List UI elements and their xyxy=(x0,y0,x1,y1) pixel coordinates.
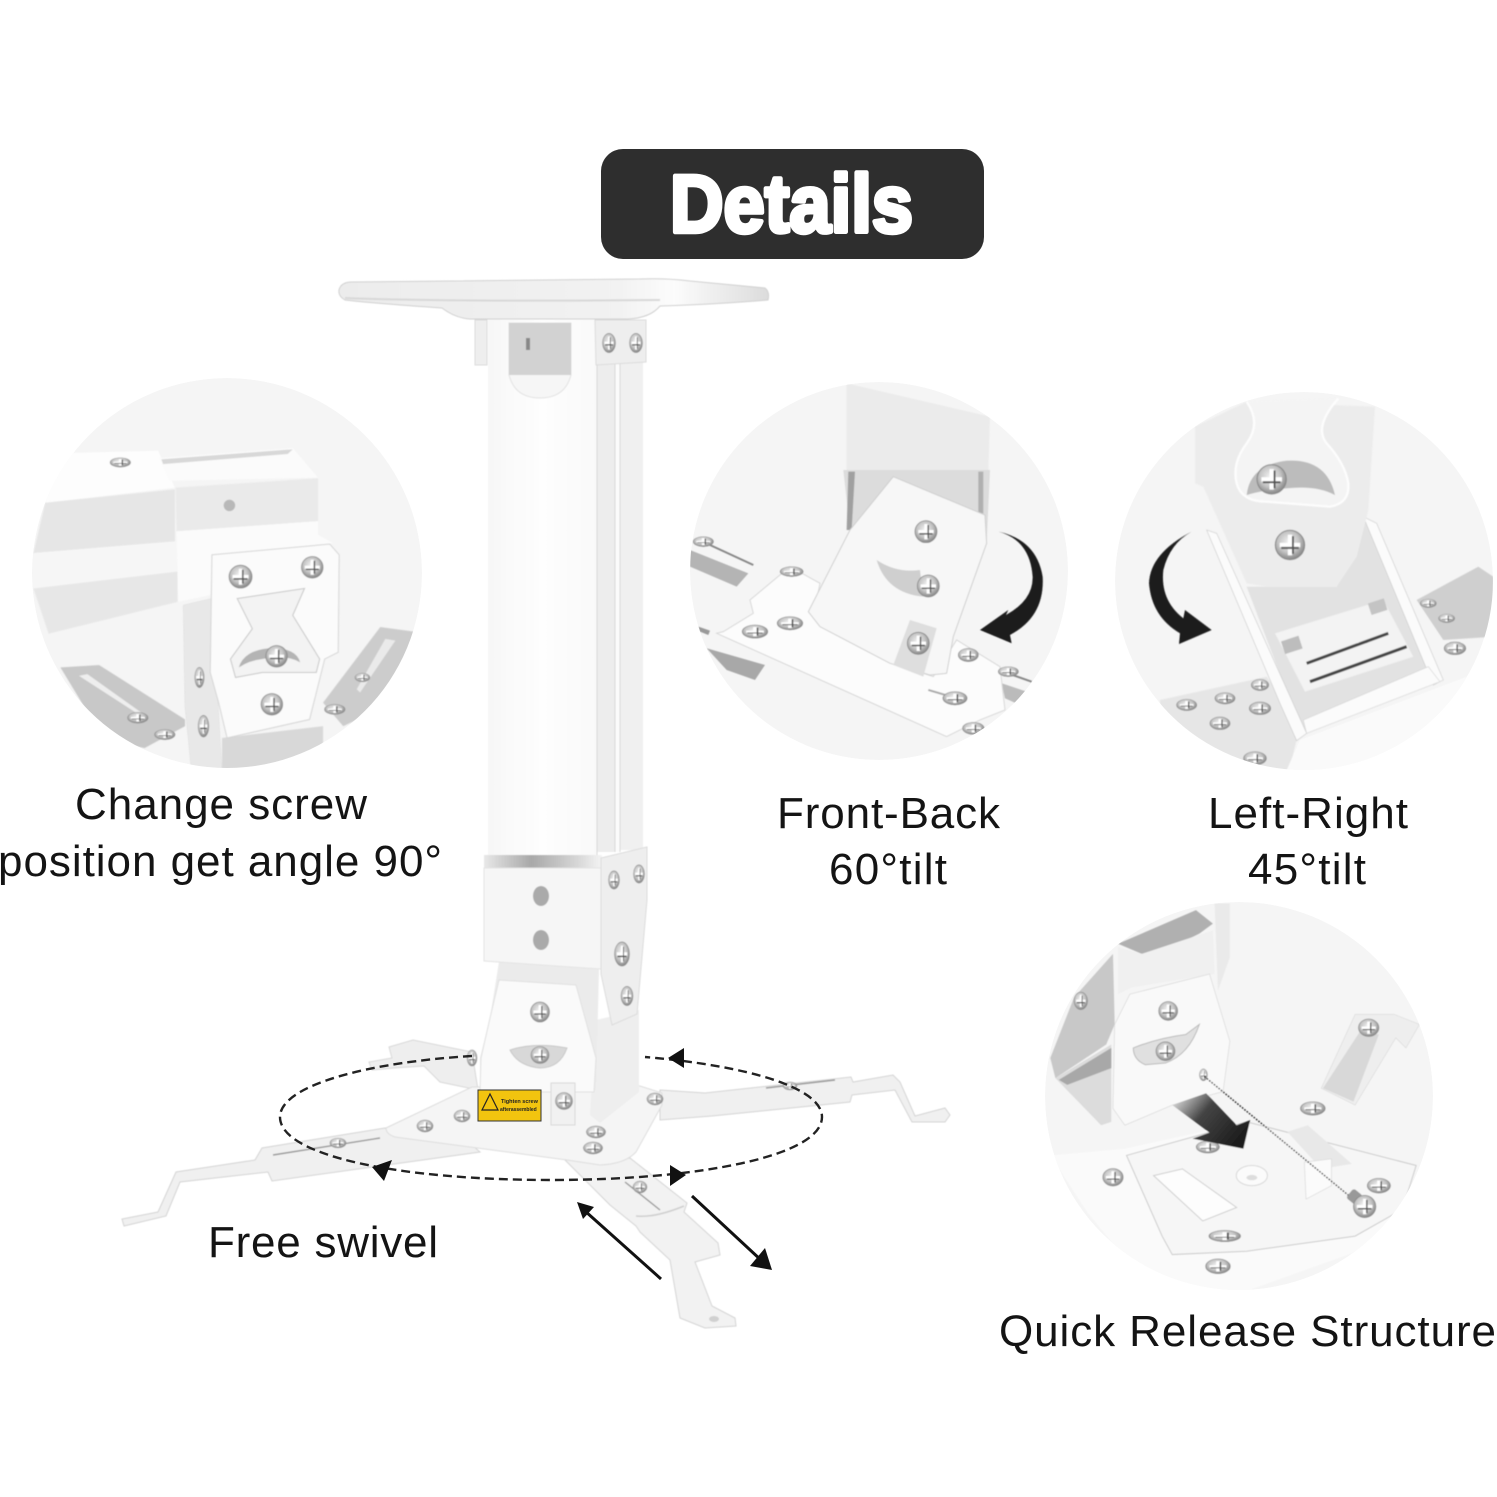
caption: left-right tilt: 45°tilt xyxy=(1248,845,1366,894)
caption: front-back tilt: 60°tilt xyxy=(829,845,947,894)
base plate xyxy=(386,1050,663,1165)
caption: front-back tilt: Front-Back xyxy=(777,789,1001,838)
top bracket xyxy=(475,320,646,398)
detail circle: quick release structure xyxy=(1045,902,1433,1300)
height adjustment collar xyxy=(484,847,647,1025)
telescopic column xyxy=(488,315,643,855)
free swivel dashed ring xyxy=(280,1048,822,1186)
detail circle: screw position 90 degrees xyxy=(32,378,422,773)
slide arrows xyxy=(577,1196,772,1279)
warning label: afterassembled xyxy=(500,1107,537,1113)
curved arrow xyxy=(1149,532,1212,644)
title badge: Details: Details xyxy=(670,159,913,250)
rear-left mounting arm xyxy=(369,1040,478,1090)
caption: change screw position xyxy=(0,780,442,886)
caption: change screw position: position get angle 90° xyxy=(0,837,442,886)
press arrow xyxy=(1172,1093,1250,1149)
warning label xyxy=(478,1090,541,1121)
horizontal arm xyxy=(33,448,333,634)
adjustment plate xyxy=(210,544,339,738)
caption: left-right tilt xyxy=(1208,789,1408,894)
caption: change screw position: Change screw xyxy=(75,780,367,829)
bracket frame and rollers xyxy=(1207,517,1443,741)
lower plates and arm xyxy=(1102,1014,1420,1274)
detail circle: left-right tilt xyxy=(1115,392,1497,783)
curved arrow xyxy=(980,532,1043,643)
top adjustment plate xyxy=(1195,398,1375,587)
dotted screw path and screw xyxy=(1204,1076,1376,1218)
right mounting arm xyxy=(660,1075,950,1122)
caption: free swivel: Free swivel xyxy=(208,1218,438,1267)
tilted bracket xyxy=(808,477,987,677)
side arms xyxy=(60,627,417,748)
caption: quick release structure: Quick Release Structure xyxy=(999,1307,1496,1356)
left mounting arm xyxy=(122,1128,480,1226)
base plate and arms xyxy=(690,537,1032,737)
upper column xyxy=(843,383,990,543)
top plate xyxy=(339,279,769,319)
angled bracket xyxy=(183,598,323,773)
front mounting arm xyxy=(565,1158,736,1328)
caption: left-right tilt: Left-Right xyxy=(1208,789,1408,838)
title badge: Details xyxy=(601,149,984,259)
warning label: Tighten screw xyxy=(501,1099,539,1105)
caption: front-back tilt xyxy=(777,789,1001,894)
detail circle: front-back tilt xyxy=(690,382,1068,760)
main product: ceiling mount xyxy=(122,279,950,1328)
upper bracket xyxy=(1050,903,1230,1125)
lower plates xyxy=(1160,567,1497,783)
vertical mounting bracket xyxy=(480,962,639,1125)
